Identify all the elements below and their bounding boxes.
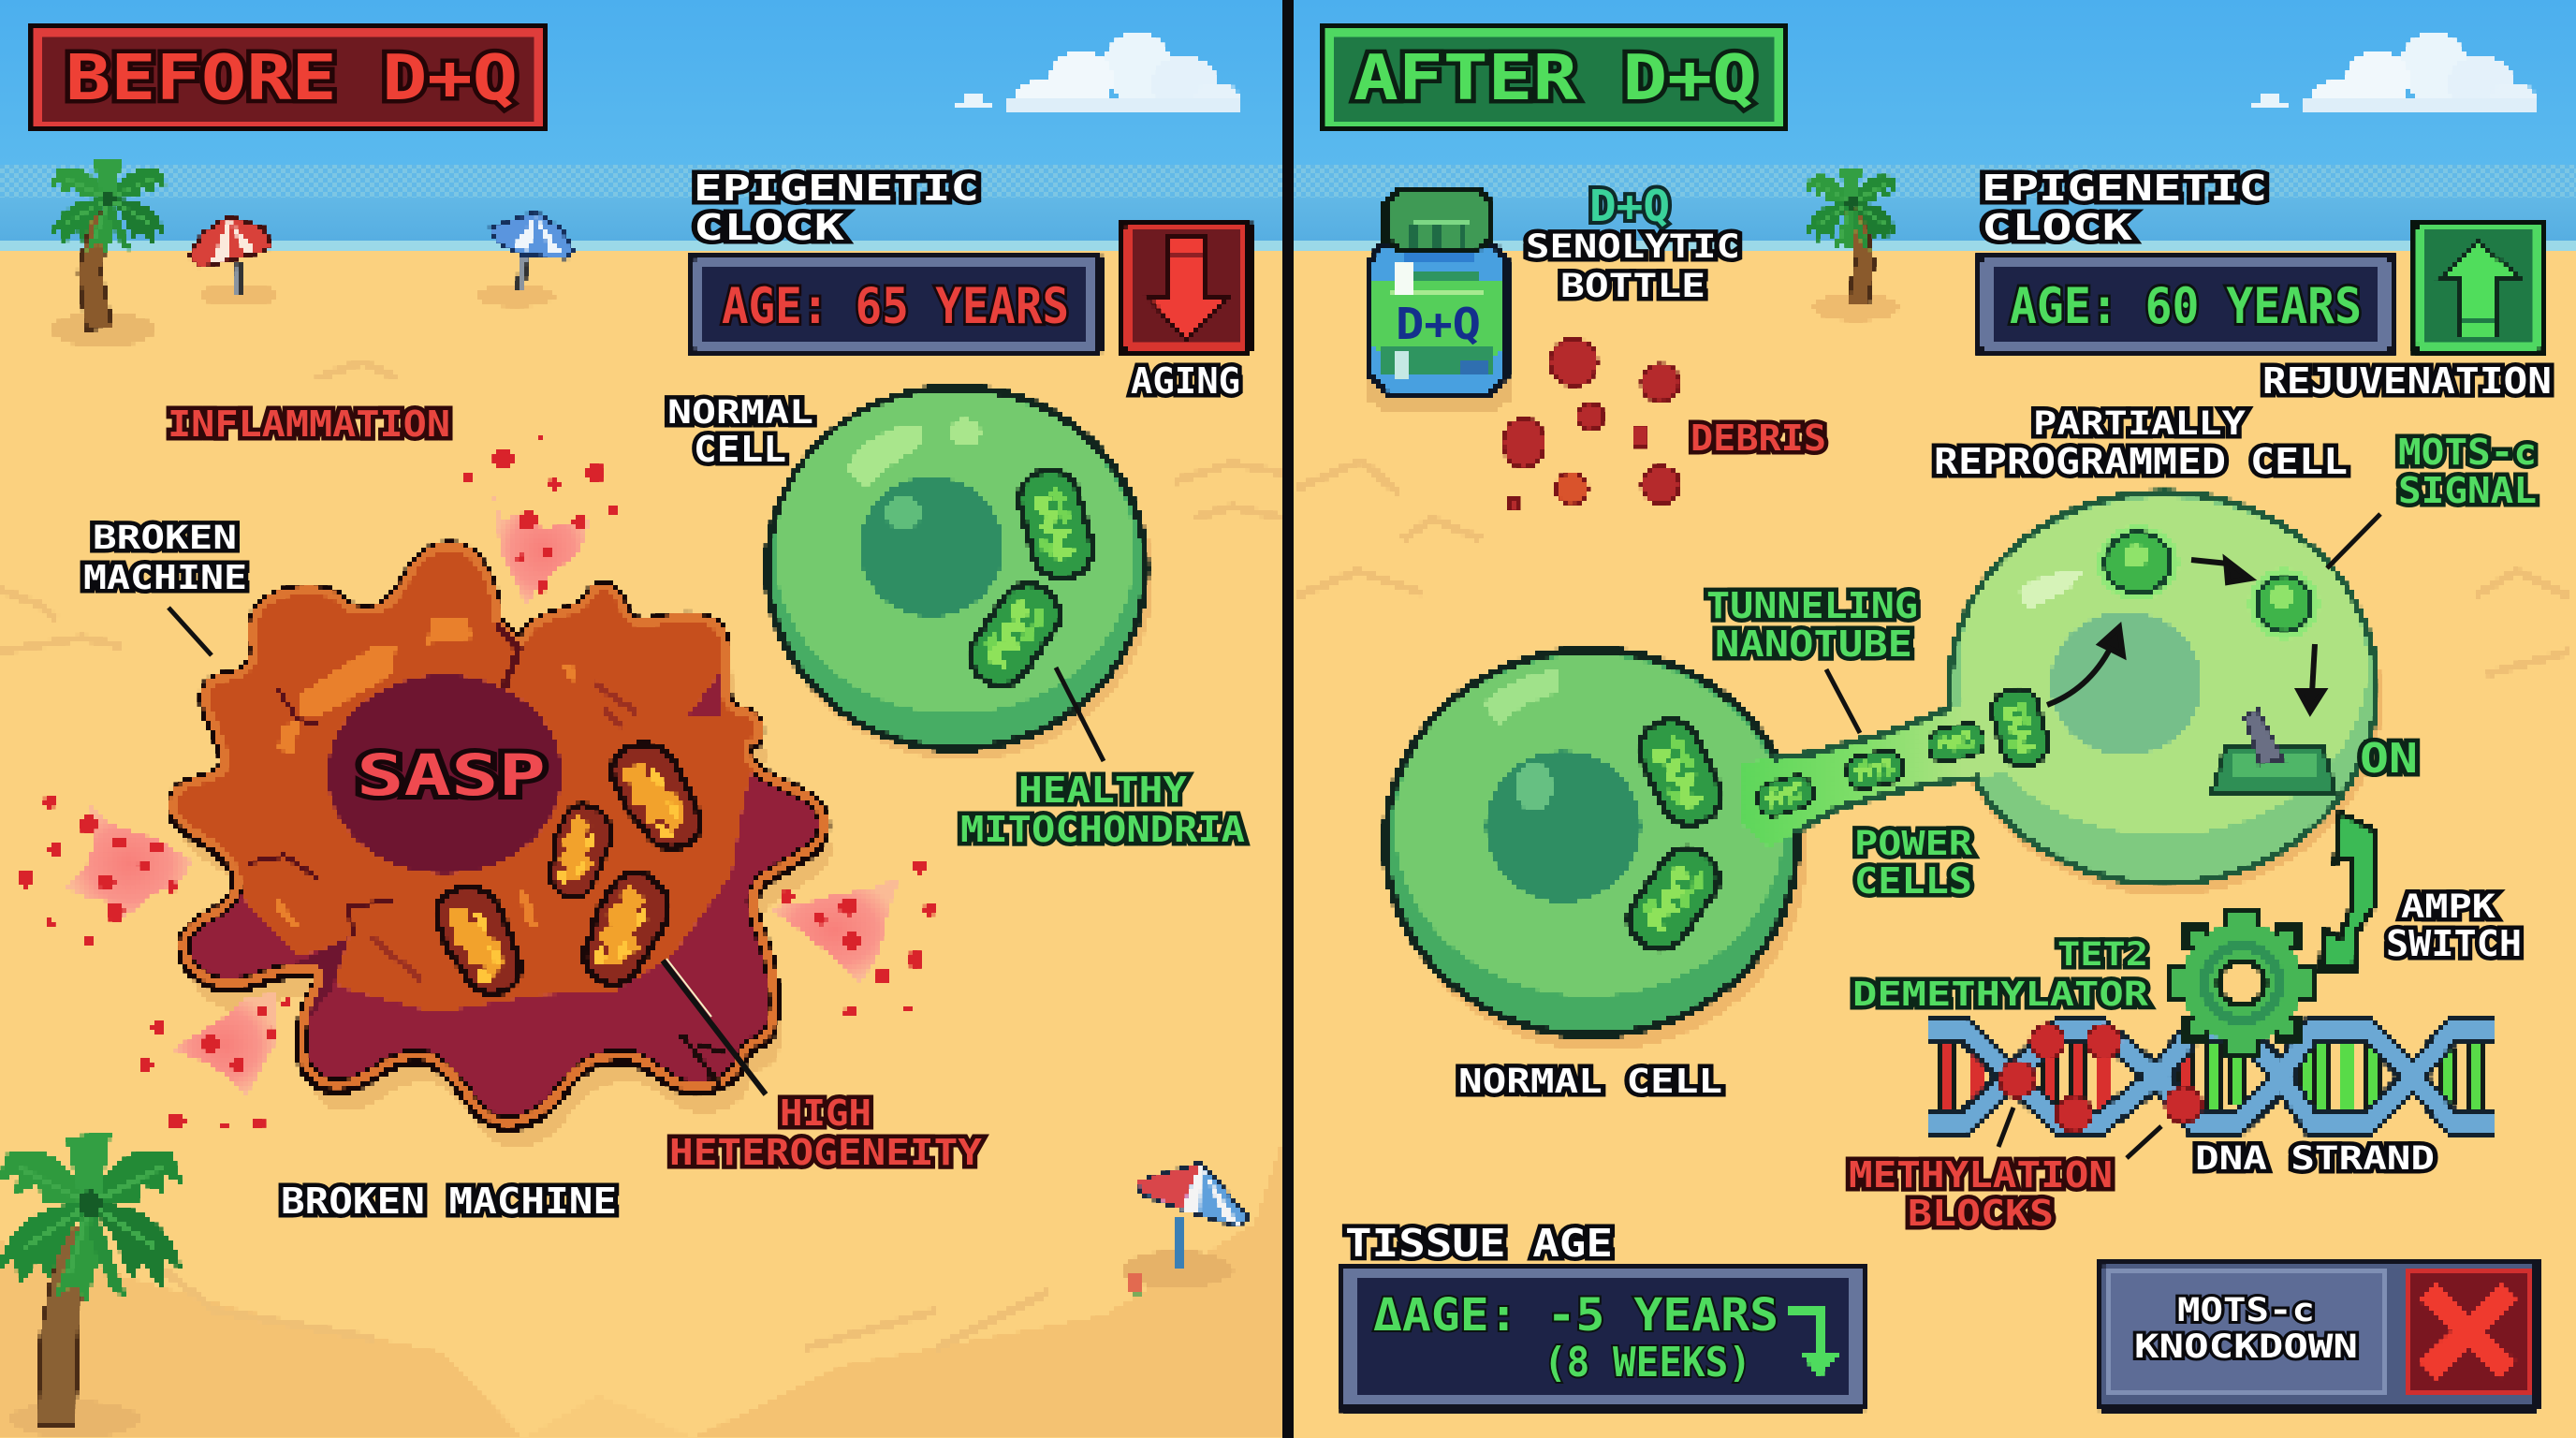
label: D+Q senolytic bottle	[1526, 181, 1740, 305]
arrows: signal pathway	[2047, 560, 2323, 712]
SASP nucleus	[328, 675, 562, 873]
illustration: broken senescent cell	[140, 524, 842, 1149]
pointer line: tunneling nanotube	[1826, 669, 1860, 733]
clock display: age 65	[688, 253, 1103, 356]
icon: palm tree bottom left	[0, 1133, 183, 1438]
icon: cloud	[957, 32, 1240, 114]
label: epigenetic clock: EPIGENETIC	[694, 168, 979, 209]
nucleus	[2050, 611, 2202, 756]
label: high heterogeneity: HIGH	[780, 1093, 871, 1134]
label: D+Q senolytic bottle: SENOLYTIC	[1526, 228, 1740, 266]
pointer line: broken machine	[168, 608, 212, 655]
label: epigenetic clock: CLOCK	[1982, 207, 2132, 248]
label: healthy mitochondria	[960, 770, 1245, 850]
label: tunneling nanotube: NANOTUBE	[1715, 624, 1912, 665]
label: DNA strand: DNA STRAND	[2195, 1140, 2435, 1178]
icon: palm tree	[1805, 167, 1899, 321]
label: normal cell: NORMAL CELL	[1458, 1063, 1722, 1101]
title: after D+Q: AFTER D+Q	[1354, 41, 1757, 114]
title: before D+Q: BEFORE D+Q	[66, 41, 518, 114]
label: tunneling nanotube	[1706, 585, 1918, 665]
value: delta age -5 years	[1373, 1289, 1778, 1387]
label: epigenetic clock: CLOCK	[694, 207, 844, 248]
label: partially reprogrammed cell: REPROGRAMMED CELL	[1934, 441, 2348, 482]
icon: debris particles	[1503, 339, 1679, 509]
header panel: after	[1321, 22, 1789, 133]
illustration: normal cell with nanotube	[1385, 650, 2053, 1050]
icon: ON switch	[2212, 710, 2335, 792]
icon: TET2 gear	[2168, 910, 2316, 1056]
pointer line: MOTS-c signal	[2327, 514, 2380, 568]
label: healthy mitochondria: MITOCHONDRIA	[960, 809, 1245, 850]
label: inflammation: INFLAMMATION	[168, 404, 450, 445]
label: normal cell: CELL	[694, 429, 786, 470]
nucleus	[859, 477, 1003, 617]
label: TET2 demethylator: DEMETHYLATOR	[1852, 976, 2148, 1014]
header panel: before	[29, 22, 549, 133]
label: MOTS-c knockdown: MOTS-c	[2177, 1292, 2315, 1329]
label: partially reprogrammed cell: PARTIALLY	[2033, 405, 2246, 443]
illustration: partially reprogrammed cell	[1950, 492, 2382, 895]
panel: tissue age	[1338, 1262, 1867, 1412]
label: high heterogeneity: HETEROGENEITY	[669, 1132, 982, 1173]
tunneling nanotube	[1741, 693, 2003, 847]
panel: after D+Q	[1294, 0, 2576, 1438]
value: age 60 years: AGE: 60 YEARS	[2010, 278, 2362, 335]
label: methylation blocks: METHYLATION	[1849, 1154, 2113, 1196]
value: age 65 years: AGE: 65 YEARS	[722, 278, 1069, 335]
clock display: age 60	[1976, 253, 2395, 356]
label: debris: DEBRIS	[1690, 418, 1826, 459]
label: MOTS-c signal: SIGNAL	[2398, 470, 2537, 511]
panel: before D+Q	[0, 0, 1282, 1438]
methylation blocks	[1999, 1024, 2202, 1132]
icon: blue umbrella	[476, 212, 573, 307]
icon: rejuvenation up arrow	[2411, 218, 2547, 357]
label: partially reprogrammed cell	[1934, 405, 2348, 482]
label: MOTS-c signal	[2398, 432, 2537, 511]
label: tissue age: TISSUE AGE	[1345, 1221, 1613, 1266]
label: power cells	[1854, 825, 1972, 902]
label: methylation blocks	[1849, 1154, 2113, 1234]
label: MOTS-c knockdown: KNOCKDOWN	[2134, 1328, 2358, 1366]
divider	[1282, 0, 1294, 1438]
label: AMPK switch: AMPK	[2401, 888, 2496, 926]
DNA strand	[1930, 1024, 2494, 1132]
label: normal cell: NORMAL	[667, 394, 813, 432]
label: ON: ON	[2360, 735, 2418, 783]
label: D+Q senolytic bottle: D+Q	[1589, 181, 1670, 231]
icon: down hook arrow	[1790, 1311, 1839, 1378]
damaged mitochondria	[430, 732, 709, 1005]
panel: MOTS-c knockdown	[2097, 1258, 2540, 1412]
label: epigenetic clock	[694, 168, 979, 248]
label: TET2 demethylator: TET2	[2057, 936, 2148, 974]
label: broken machine callout: BROKEN	[93, 520, 237, 557]
arrow: AMPK loop	[2321, 813, 2375, 969]
label: broken machine callout: MACHINE	[83, 559, 247, 597]
label: normal cell	[667, 394, 813, 470]
label: epigenetic clock: EPIGENETIC	[1982, 168, 2267, 209]
label: TET2 demethylator	[1852, 936, 2148, 1014]
label: AMPK switch	[2386, 888, 2522, 964]
bottle label text: D+Q	[1396, 299, 1481, 349]
label: broken machine: BROKEN MACHINE	[281, 1181, 617, 1222]
icon: aging down arrow	[1119, 218, 1252, 357]
icon: D+Q senolytic bottle	[1365, 189, 1514, 412]
label: MOTS-c knockdown	[2134, 1292, 2358, 1366]
label: D+Q senolytic bottle: BOTTLE	[1560, 268, 1705, 305]
label: methylation blocks: BLOCKS	[1908, 1193, 2054, 1234]
pointer line: high heterogeneity	[663, 959, 766, 1094]
illustration: normal cell	[768, 388, 1153, 760]
icon: red X button	[2407, 1269, 2530, 1391]
label: SASP: SASP	[357, 742, 546, 809]
label: high heterogeneity	[669, 1093, 982, 1173]
label: power cells: CELLS	[1854, 860, 1972, 902]
pointer line: healthy mitochondria	[1056, 668, 1104, 761]
mitochondria	[1618, 683, 2053, 961]
icon: palm tree top left	[51, 159, 167, 347]
label: broken machine callout	[83, 520, 247, 597]
label: aging: AGING	[1131, 360, 1240, 402]
icon: red umbrella	[189, 216, 278, 306]
label: healthy mitochondria: HEALTHY	[1018, 770, 1187, 811]
value: delta age -5 years: (8 WEEKS)	[1544, 1339, 1751, 1387]
label: power cells: POWER	[1854, 825, 1972, 863]
label: tunneling nanotube: TUNNELING	[1706, 585, 1918, 626]
icon: beach umbrella and ball	[1121, 1163, 1249, 1298]
value: delta age -5 years: ΔAGE: -5 YEARS	[1373, 1289, 1778, 1342]
label: MOTS-c signal: MOTS-c	[2398, 432, 2537, 473]
label: epigenetic clock	[1982, 168, 2267, 248]
label: AMPK switch: SWITCH	[2386, 923, 2522, 964]
healthy mitochondria	[959, 464, 1099, 697]
pointer lines: methylation blocks	[1998, 1108, 2161, 1158]
icon: cloud	[2253, 32, 2537, 114]
splats: inflammation particles	[18, 433, 937, 1130]
label: rejuvenation: REJUVENATION	[2262, 360, 2552, 402]
MOTS-c signal dots	[2097, 525, 2320, 639]
